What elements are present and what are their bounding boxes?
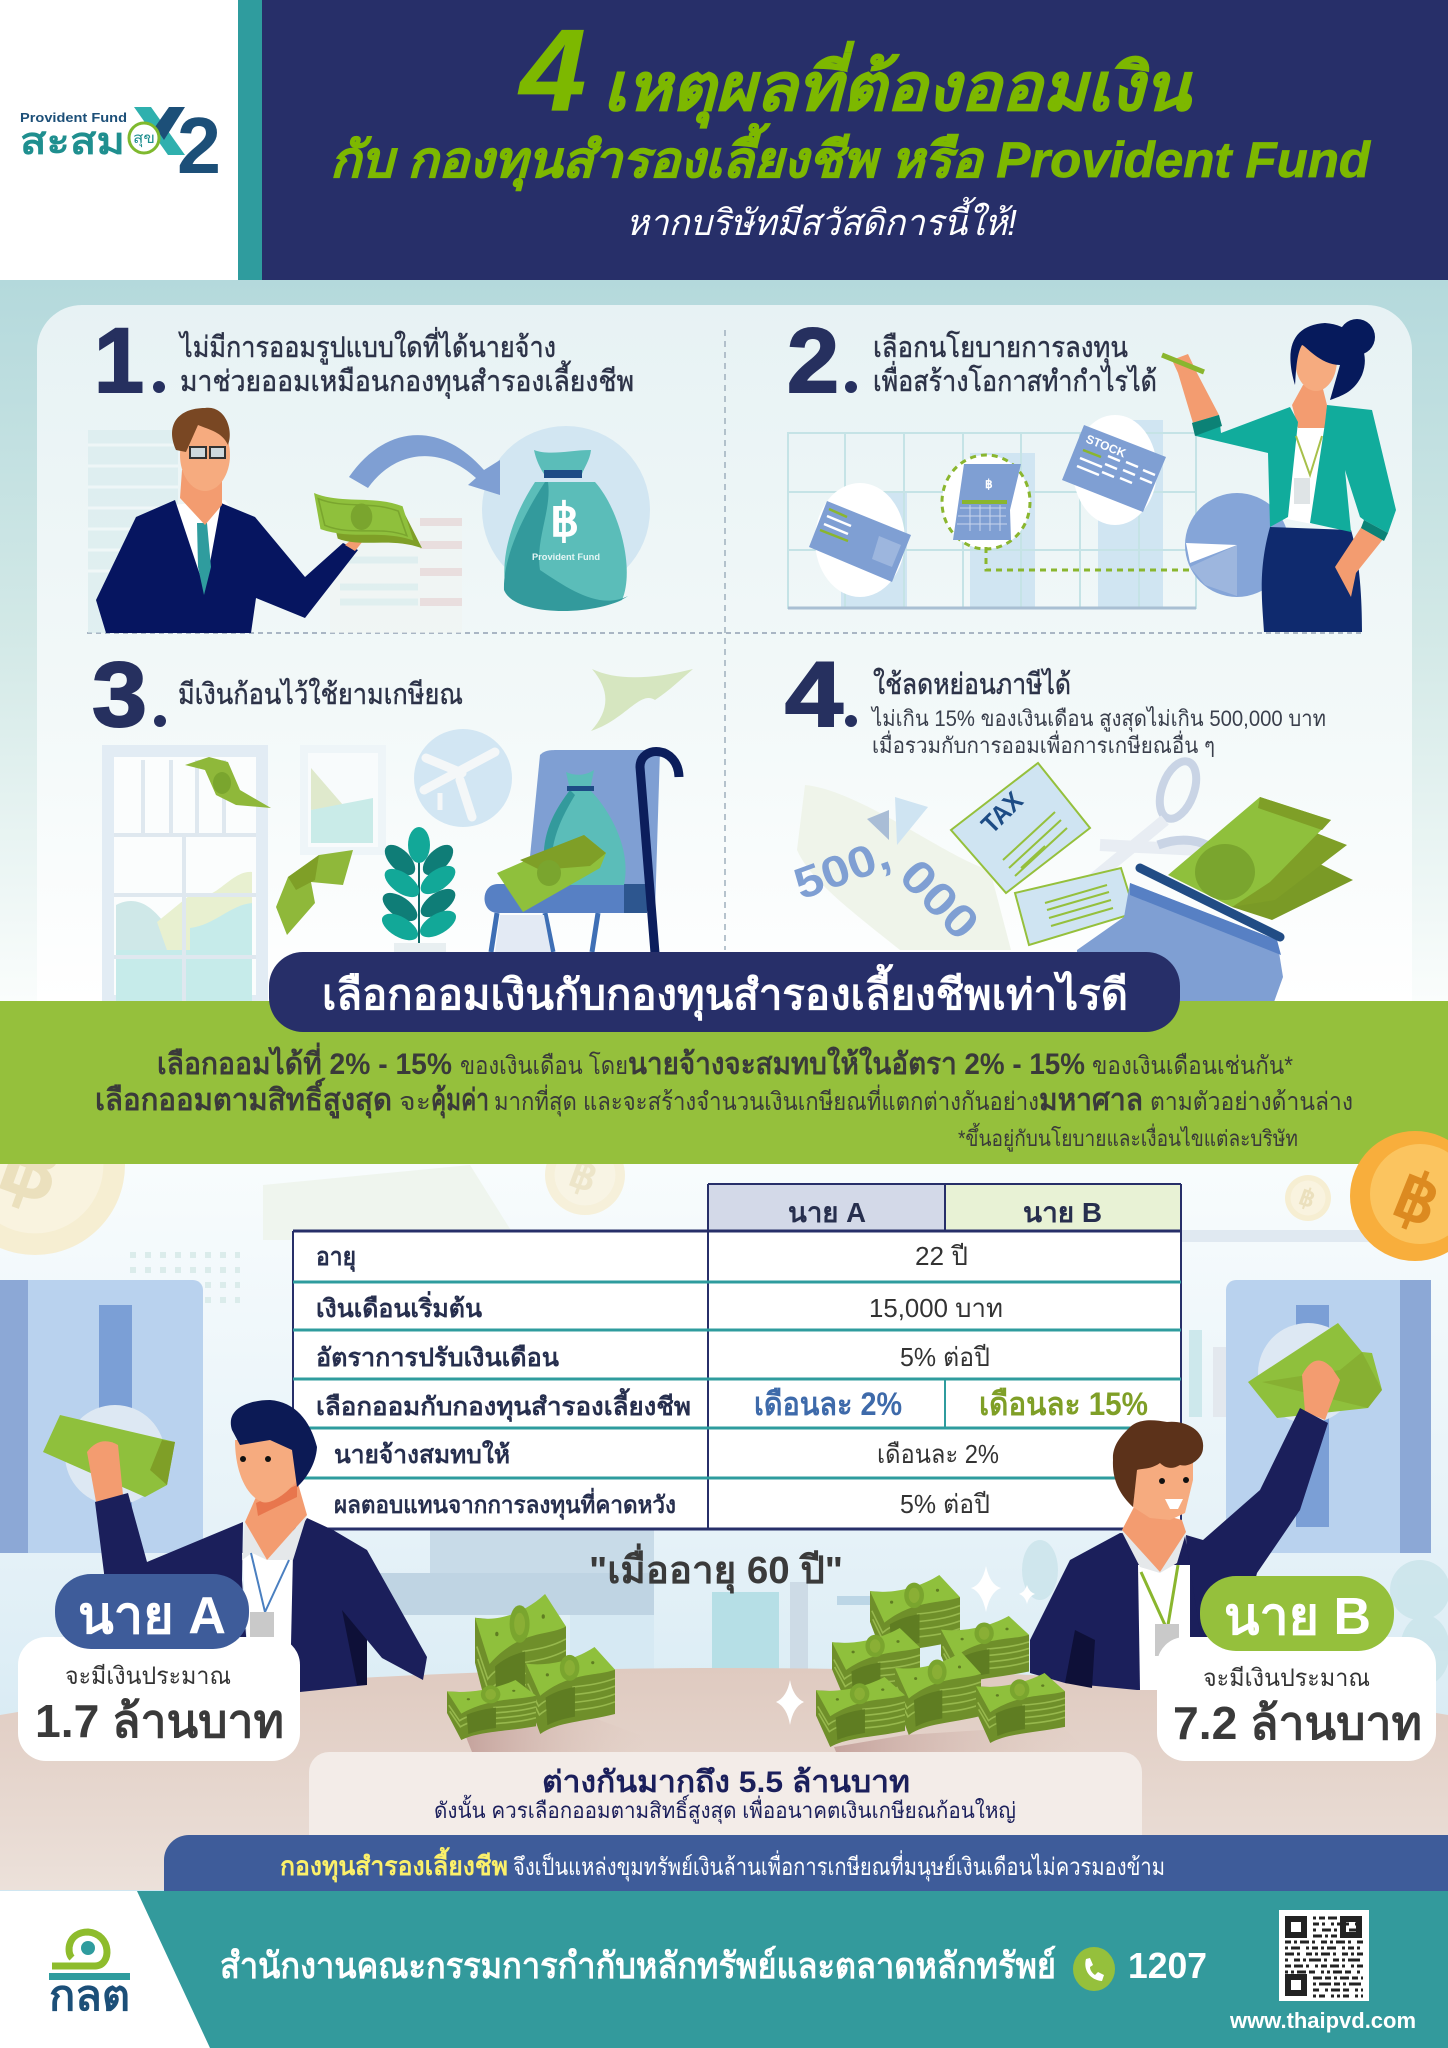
heading pill: how much to save bbox=[269, 952, 1180, 1032]
reason 2 illustration: chart, documents and woman: ฿ bbox=[985, 477, 993, 491]
green explanation band: คุ้มค่า bbox=[431, 1084, 489, 1119]
gold coin bbox=[1350, 1131, 1448, 1261]
footer organisation name: สำนักงานคณะกรรมการกำกับหลักทรัพย์และตลาดหลักทรัพย์ bbox=[220, 1945, 1056, 1986]
reason 1 heading: มาช่วยออมเหมือนกองทุนสำรองเลี้ยงชีพ bbox=[180, 360, 634, 399]
heading: at age 60: "เมื่ออายุ 60 ปี" bbox=[589, 1543, 843, 1594]
conclusion banner: กองทุนสำรองเลี้ยงชีพ bbox=[280, 1846, 508, 1883]
reason 3 heading: 3 bbox=[92, 644, 147, 746]
logo: Provident Fund X2: สะสม bbox=[20, 121, 125, 163]
reason 2 heading bbox=[787, 310, 1157, 412]
background scene: coins and buildings bbox=[0, 1075, 1448, 1685]
footer bbox=[0, 1891, 1448, 2048]
conclusion banner bbox=[164, 1835, 1448, 1891]
comparison table: อายุ bbox=[316, 1243, 356, 1273]
title bbox=[330, 5, 1371, 243]
woman figure bbox=[1162, 319, 1396, 632]
green explanation band: จะ bbox=[399, 1088, 431, 1116]
green explanation band: เลือกออมตามสิทธิ์สูงสุด bbox=[95, 1077, 392, 1119]
logo: Provident Fund X2: สุข bbox=[133, 130, 155, 148]
reason 4 heading: ไม่เกิน 15% ของเงินเดือน สูงสุดไม่เกิน 500,000 บาท bbox=[870, 706, 1326, 732]
green explanation band: ของเงินเดือนเช่นกัน* bbox=[1092, 1052, 1293, 1080]
reason 2 illustration: chart, documents and woman: STOCK bbox=[1084, 432, 1128, 461]
phone number: 1207 bbox=[1128, 1945, 1207, 1986]
reason 3 heading: มีเงินก้อนไว้ใช้ยามเกษียณ bbox=[178, 677, 463, 711]
reason 1 heading: ไม่มีการออมรูปแบบใดที่ได้นายจ้าง bbox=[178, 327, 556, 365]
reason 4 illustration: 500,000, torn tax bill, scissors and purse: 500, bbox=[788, 830, 897, 909]
SEC logo: กลต bbox=[49, 1972, 130, 2019]
reason 2 heading: เลือกนโยบายการลงทุน bbox=[873, 330, 1128, 365]
title: หากบริษัทมีสวัสดิการนี้ให้! bbox=[626, 196, 1017, 243]
callout: difference bbox=[309, 1752, 1142, 1838]
logo: Provident Fund X2: Provident Fund bbox=[20, 110, 127, 125]
comparison table: 5% ต่อปี bbox=[900, 1342, 990, 1372]
comparison table bbox=[293, 1184, 1181, 1529]
card: nai B result: จะมีเงินประมาณ bbox=[1203, 1665, 1370, 1692]
reason 4 heading: 4 bbox=[785, 644, 843, 746]
comparison table: เดือนละ 2% bbox=[877, 1439, 999, 1469]
comparison table: 15,000 บาท bbox=[869, 1293, 1003, 1323]
sparkle bbox=[776, 1680, 804, 1725]
card: nai A result: นาย A bbox=[78, 1587, 226, 1645]
reason 4 heading: ใช้ลดหย่อนภาษีได้ bbox=[873, 667, 1071, 701]
title: กับ กองทุนสำรองเลี้ยงชีพ หรือ Provident Fund bbox=[330, 123, 1371, 191]
reason 4 illustration: 500,000, torn tax bill, scissors and purse bbox=[788, 756, 1353, 1002]
reason 2 heading: เพื่อสร้างโอกาสทำกำไรได้ bbox=[873, 361, 1157, 398]
comparison table: อัตราการปรับเงินเดือน bbox=[316, 1344, 559, 1372]
green explanation band: ตามตัวอย่างด้านล่าง bbox=[1150, 1088, 1353, 1116]
reason 1 heading bbox=[94, 310, 634, 412]
card: nai A result: 1.7 ล้านบาท bbox=[35, 1695, 284, 1747]
money stacks: nai B bbox=[816, 1575, 1090, 1752]
header banner bbox=[0, 0, 1448, 280]
QR code bbox=[1279, 1910, 1369, 2001]
website: www.thaipvd.com bbox=[1229, 2008, 1416, 2033]
title: 4 bbox=[518, 5, 586, 135]
money stacks: nai A bbox=[447, 1594, 650, 1752]
comparison table: เดือนละ 2% bbox=[754, 1386, 902, 1422]
comparison table: เดือนละ 15% bbox=[979, 1386, 1148, 1422]
comparison table: 22 ปี bbox=[915, 1241, 968, 1271]
card: nai A result: จะมีเงินประมาณ bbox=[65, 1663, 231, 1690]
comparison table: นาย B bbox=[1023, 1197, 1102, 1228]
comparison table: ผลตอบแทนจากการลงทุนที่คาดหวัง bbox=[334, 1487, 676, 1521]
reason 1 illustration: man, money and savings bag: Provident Fund bbox=[532, 552, 600, 563]
conclusion banner: จึงเป็นแหล่งขุมทรัพย์เงินล้านเพื่อการเกษียณที่มนุษย์เงินเดือนไม่ควรมองข้าม bbox=[513, 1850, 1165, 1882]
reason 1 heading: 1 bbox=[94, 310, 144, 412]
panel: four reasons bbox=[37, 305, 1412, 1002]
reason 4 illustration: 500,000, torn tax bill, scissors and purse: TAX bbox=[975, 785, 1029, 839]
logo: Provident Fund X2: 2 bbox=[177, 101, 221, 190]
callout: difference: ดังนั้น ควรเลือกออมตามสิทธิ์สูงสุด เพื่ออนาคตเงินเกษียณก้อนใหญ่ bbox=[434, 1795, 1016, 1824]
title: เหตุผลที่ต้องออมเงิน bbox=[603, 41, 1193, 129]
green explanation band: นายจ้างจะสมทบให้ในอัตรา 2% - 15% bbox=[628, 1046, 1085, 1081]
section background: four reasons bbox=[0, 280, 1448, 1002]
reason 4 heading bbox=[785, 644, 1326, 758]
comparison table: 5% ต่อปี bbox=[900, 1489, 990, 1519]
SEC logo bbox=[49, 1932, 130, 2019]
phone icon bbox=[1073, 1947, 1115, 1991]
green explanation band: ของเงินเดือน โดย bbox=[460, 1051, 628, 1080]
green explanation band: มากที่สุด และจะสร้างจำนวนเงินเกษียณที่แตกต่างกันอย่าง bbox=[494, 1084, 1039, 1117]
reason 2 illustration: chart, documents and woman bbox=[788, 319, 1396, 632]
logo: Provident Fund X2 bbox=[20, 101, 221, 190]
man A with money bbox=[43, 1400, 427, 1692]
card: nai B result: 7.2 ล้านบาท bbox=[1173, 1697, 1422, 1749]
reason 4 illustration: 500,000, torn tax bill, scissors and purse: 000 bbox=[890, 849, 990, 950]
card: nai B result: นาย B bbox=[1224, 1588, 1371, 1646]
card: nai B result bbox=[1157, 1576, 1436, 1761]
callout: difference: ต่างกันมากถึง 5.5 ล้านบาท bbox=[542, 1766, 910, 1799]
comparison table: นาย A bbox=[788, 1197, 866, 1228]
card: nai A result bbox=[18, 1574, 300, 1761]
comparison table: เลือกออมกับกองทุนสำรองเลี้ยงชีพ bbox=[316, 1387, 691, 1423]
green explanation band: เลือกออมได้ที่ 2% - 15% bbox=[157, 1042, 452, 1081]
man B with money bbox=[1030, 1323, 1382, 1690]
reason 1 illustration: man, money and savings bag: ฿ bbox=[550, 494, 579, 546]
desk bbox=[0, 1668, 1448, 1890]
comparison table: นายจ้างสมทบให้ bbox=[334, 1439, 510, 1469]
section background: savings comparison bbox=[0, 1164, 1448, 1891]
reason 1 illustration: man, money and savings bag bbox=[88, 408, 650, 633]
heading pill: how much to save: เลือกออมเงินกับกองทุนสำรองเลี้ยงชีพเท่าไรดี bbox=[322, 963, 1128, 1021]
green explanation band: มหาศาล bbox=[1039, 1084, 1143, 1117]
green explanation band bbox=[0, 1001, 1448, 1164]
reason 3 illustration: window, plant, chair, floating money bbox=[108, 669, 693, 1001]
reason 2 heading: 2 bbox=[787, 310, 839, 412]
green explanation band: *ขึ้นอยู่กับนโยบายและเงื่อนไขแต่ละบริษัท bbox=[958, 1123, 1298, 1152]
reason 4 heading: เมื่อรวมกับการออมเพื่อการเกษียณอื่น ๆ bbox=[872, 730, 1215, 758]
comparison table: เงินเดือนเริ่มต้น bbox=[316, 1291, 482, 1323]
reason 3 heading bbox=[92, 644, 463, 746]
sparkles bbox=[971, 1566, 1035, 1612]
